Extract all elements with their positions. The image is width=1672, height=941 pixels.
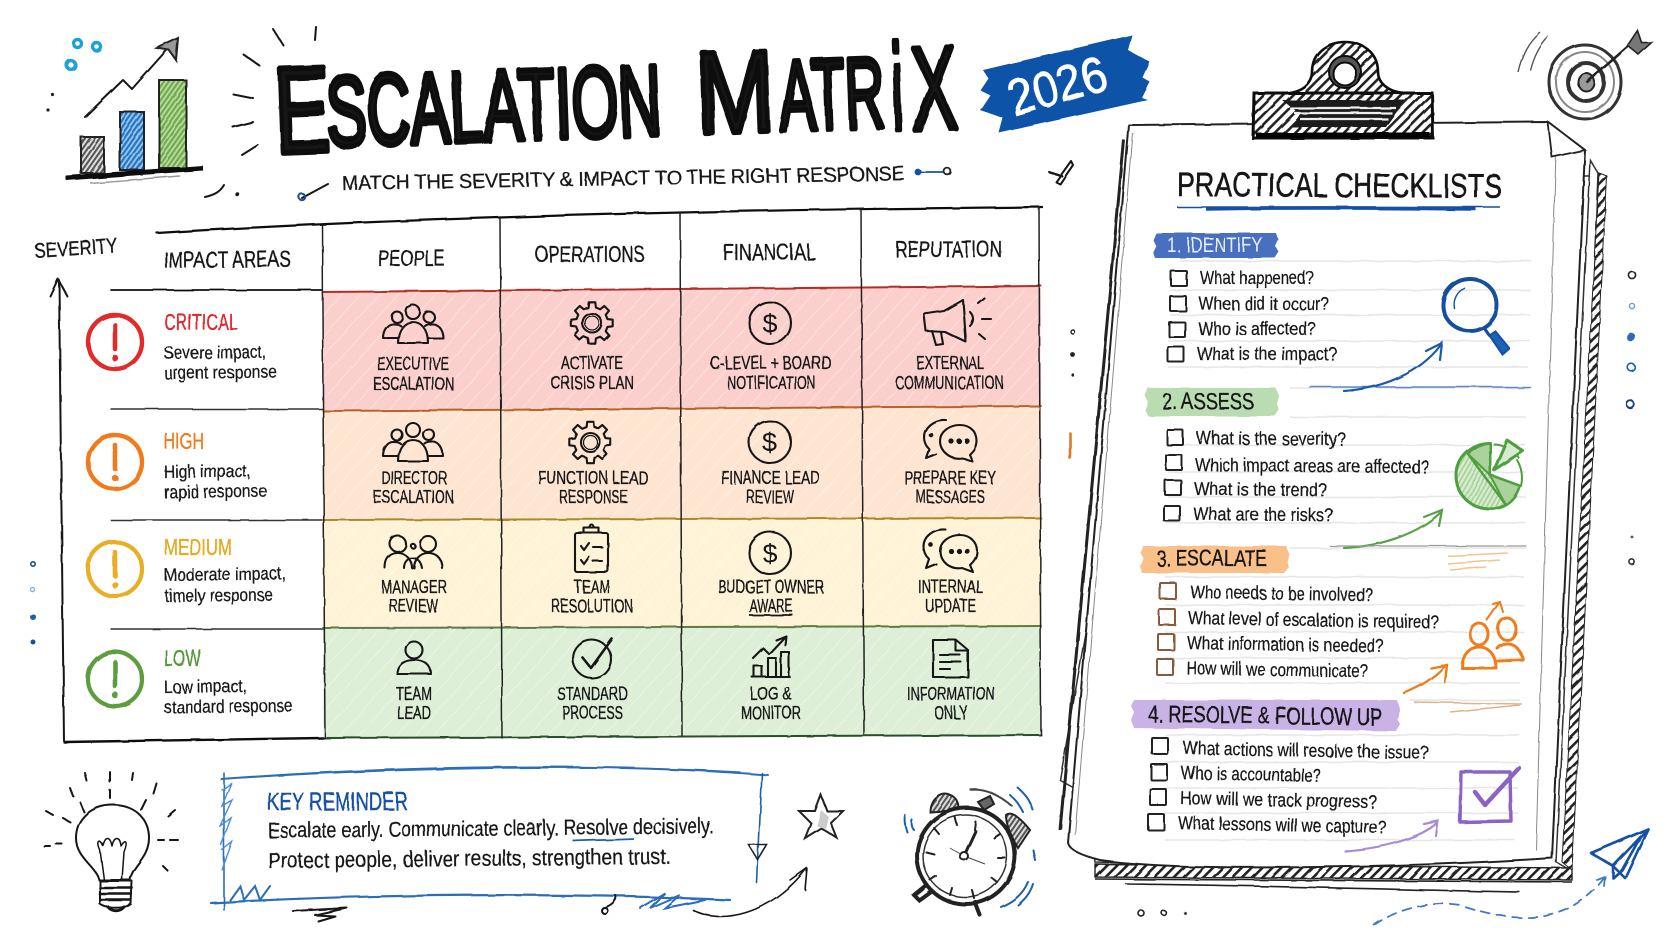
row: high cells: ESCALATION: [373, 487, 454, 507]
header row: PEOPLE: [378, 245, 445, 271]
row: medium cells: BUDGET OWNER: [718, 577, 824, 597]
row: low label: [88, 645, 293, 717]
row: critical cells: EXECUTIVE: [377, 354, 449, 374]
row: medium label: [88, 534, 286, 606]
row: low cells: PROCESS: [562, 703, 623, 723]
arrow: identify: [1310, 343, 1530, 391]
icon: magnifier: [1443, 279, 1509, 354]
row: medium cells: UPDATE: [925, 596, 976, 616]
reminder heading: KEY REMINDER: [267, 788, 408, 816]
section 2: assess: What are the risks?: [1193, 503, 1333, 525]
row: critical label: CRITICAL: [164, 309, 238, 335]
critical row fill: [323, 286, 1041, 411]
row: high cells: [373, 420, 996, 507]
row: low label: standard response: [164, 696, 293, 717]
row: high cells: MESSAGES: [916, 487, 985, 507]
medium row fill: [323, 518, 1041, 628]
row: medium label: timely response: [165, 584, 273, 606]
row: critical cells: COMMUNICATION: [895, 373, 1004, 393]
header row: FINANCIAL: [723, 239, 816, 265]
section 1: identify: When did it occur?: [1199, 293, 1329, 314]
icon: pie chart: [1456, 440, 1523, 509]
icon: escalating people: [1462, 602, 1523, 668]
title: E: [272, 41, 333, 179]
section 2: assess: What is the severity?: [1196, 427, 1346, 449]
icon: target with arrow: [1518, 30, 1651, 119]
icon: pen doodle: [1049, 161, 1073, 184]
icon: growth bar chart: [46, 38, 203, 183]
icon: purple check box: [1460, 768, 1519, 822]
panel: key reminder: [211, 767, 768, 910]
icon: alarm clock: [905, 787, 1035, 915]
icon: star: [799, 795, 843, 838]
row: medium label: Moderate impact,: [164, 563, 286, 585]
row: critical cells: EXTERNAL: [916, 353, 984, 373]
arrow: assess: [1330, 510, 1526, 548]
row: high cells: DIRECTOR: [381, 468, 447, 488]
bottom pages: [1095, 864, 1572, 880]
row: medium cells: AWARE: [749, 596, 793, 616]
row: high cells: FUNCTION LEAD: [538, 468, 648, 488]
section 3: escalate: Who needs to be involved?: [1190, 581, 1373, 605]
row: low label: LOW: [164, 645, 201, 671]
back sheets: [1060, 160, 1600, 872]
matrix table: [34, 207, 1042, 742]
header row: OPERATIONS: [535, 241, 645, 267]
icon: paper plane: [1591, 829, 1648, 878]
subtitle: MATCH THE SEVERITY & IMPACT TO THE RIGHT RESPONSE: [342, 163, 905, 195]
row: high cells: FINANCE LEAD: [721, 468, 820, 488]
doodles under reminder: [293, 896, 616, 921]
high row fill: [323, 406, 1041, 520]
reminder text: [268, 813, 714, 873]
clipboard clip: [1253, 42, 1433, 138]
section 4: resolve and follow up: [1131, 700, 1522, 851]
row: low cells: ONLY: [934, 703, 968, 723]
row: high cells: PREPARE KEY: [904, 468, 996, 488]
right page edge: [1562, 173, 1607, 870]
reminder text: Escalate early. Communicate clearly. Resolve decisively.: [268, 813, 714, 843]
side dots: [30, 271, 1636, 916]
section 2: assess: 2. ASSESS: [1162, 388, 1254, 414]
arrow: resolve: [1345, 821, 1438, 851]
section 4: resolve and follow up: What lessons will we capture?: [1178, 812, 1386, 837]
row: medium cells: MANAGER: [381, 577, 447, 597]
year badge: [980, 35, 1150, 133]
section 1: identify: What happened?: [1200, 267, 1314, 288]
row: medium label: MEDIUM: [164, 534, 232, 560]
title: SCALATION: [325, 45, 663, 168]
title: ATR: [777, 37, 886, 152]
section 3: escalate: How will we communicate?: [1186, 657, 1368, 681]
axis label: SEVERITY: [34, 234, 118, 263]
checklist title: PRACTICAL CHECKLISTS: [1177, 166, 1502, 206]
icon: light bulb: [44, 772, 178, 911]
row: high label: High impact,: [164, 461, 251, 482]
header row: [164, 236, 1002, 273]
row: high label: [88, 428, 267, 502]
section 2: assess: What is the trend?: [1194, 478, 1327, 500]
row: high label: rapid response: [164, 481, 267, 502]
title rays: [205, 27, 316, 197]
section 1: identify: [1153, 233, 1530, 391]
section 4: resolve and follow up: 4. RESOLVE & FOLLOW UP: [1148, 701, 1382, 731]
section 1: identify: 1. IDENTIFY: [1167, 234, 1263, 257]
clipboard: [1060, 42, 1607, 892]
front sheet: [1068, 122, 1585, 867]
row: low cells: LEAD: [397, 703, 431, 723]
section 4: resolve and follow up: What actions will resolve the issue?: [1183, 737, 1429, 763]
title: M: [694, 26, 776, 158]
title: X: [909, 22, 959, 156]
low row fill: [323, 626, 1041, 738]
row: medium cells: INTERNAL: [918, 577, 983, 597]
section 3: escalate: What level of escalation is required?: [1188, 607, 1439, 632]
title: i: [889, 19, 905, 156]
row: low cells: LOG &: [750, 684, 792, 704]
row: critical cells: NOTIFICATION: [727, 373, 816, 393]
header row: IMPACT AREAS: [164, 246, 291, 273]
title: [272, 17, 959, 179]
row: critical cells: [373, 298, 1004, 394]
ruled lines: [1165, 261, 1532, 840]
section 4: resolve and follow up: How will we track progress?: [1180, 787, 1377, 812]
row: medium cells: [381, 525, 983, 616]
row: low cells: MONITOR: [741, 703, 801, 723]
row: critical cells: ACTIVATE: [561, 353, 623, 373]
arrow: escalate: [1404, 665, 1447, 693]
row: critical cells: C-LEVEL + BOARD: [710, 353, 831, 373]
row: low label: Low impact,: [164, 676, 247, 697]
section 3: escalate: [1140, 545, 1523, 693]
row: low cells: INFORMATION: [907, 684, 995, 704]
header row: REPUTATION: [895, 236, 1002, 262]
row: critical cells: CRISIS PLAN: [551, 373, 634, 393]
year badge: 2026: [1002, 45, 1113, 127]
severity axis: [50, 279, 67, 742]
row: low cells: [396, 636, 995, 723]
dashed arrow to plane: [1374, 877, 1605, 925]
reminder text: Protect people, deliver results, strengthen trust.: [268, 844, 671, 873]
row: medium cells: RESOLUTION: [551, 596, 633, 616]
section 2: assess: Which impact areas are affected?: [1195, 454, 1429, 477]
row: medium cells: REVIEW: [389, 596, 438, 616]
row: medium cells: TEAM: [574, 577, 610, 597]
section 4: resolve and follow up: Who is accountable?: [1181, 762, 1321, 786]
section 3: escalate: 3. ESCALATE: [1156, 545, 1267, 571]
row: low cells: TEAM: [396, 684, 432, 704]
row: critical label: [88, 309, 277, 383]
section 3: escalate: What information is needed?: [1187, 632, 1384, 656]
row: critical label: Severe impact,: [164, 342, 266, 363]
page corner fold: [1548, 122, 1585, 157]
table grid: [64, 207, 1042, 742]
row: critical cells: ESCALATION: [373, 374, 454, 394]
row: critical label: urgent response: [164, 361, 277, 383]
row: high label: HIGH: [164, 428, 204, 454]
arrow: reminder to clock: [693, 868, 807, 917]
section 1: identify: What is the impact?: [1197, 343, 1337, 364]
row: low cells: STANDARD: [557, 684, 628, 704]
row: high cells: RESPONSE: [559, 487, 628, 507]
row: high cells: REVIEW: [746, 487, 794, 507]
section 2: assess: [1145, 388, 1526, 548]
section 1: identify: Who is affected?: [1198, 318, 1316, 339]
